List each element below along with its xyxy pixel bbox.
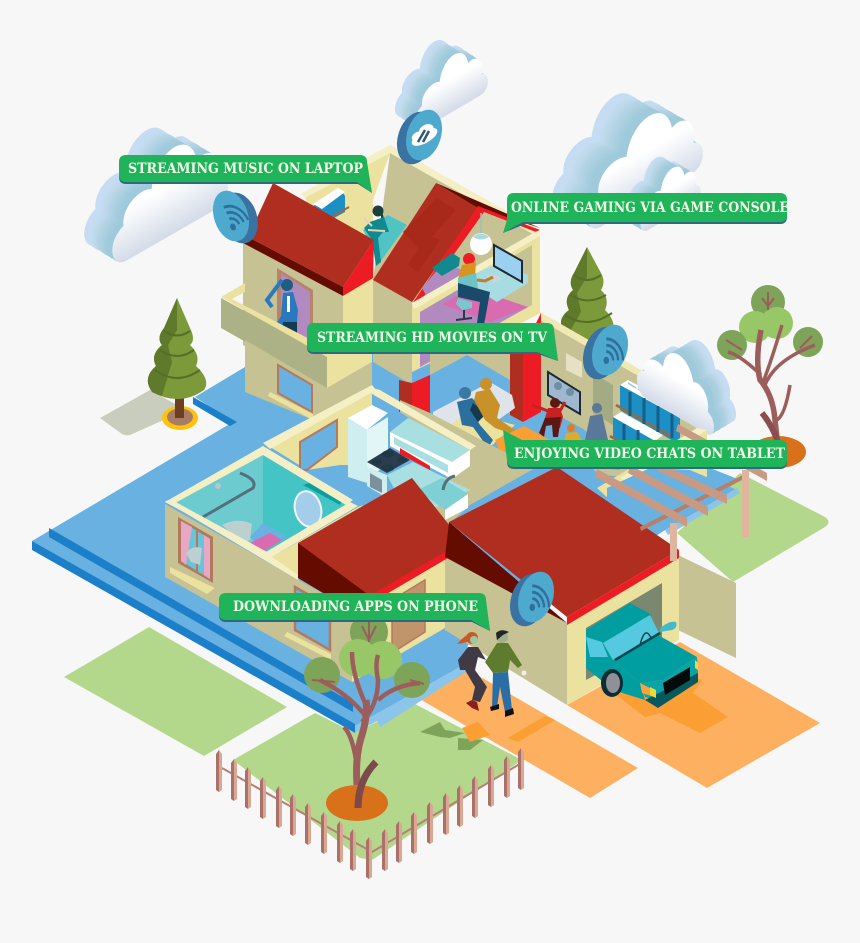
round tree: right (717, 285, 823, 468)
wifi disc: left (207, 186, 264, 248)
upper room interior (420, 245, 532, 367)
bath tub (222, 521, 252, 543)
bath right wall (263, 452, 350, 552)
sofa (433, 382, 515, 447)
red column left (399, 375, 430, 425)
rear yellow wall at pergola (597, 428, 707, 500)
label: streaming HD: STREAMING HD MOVIES ON TV (317, 330, 548, 346)
rear wall (540, 315, 707, 482)
balcony (221, 283, 372, 388)
platform front face (355, 667, 462, 733)
hanging lamp (470, 213, 492, 255)
shower rail (203, 473, 254, 517)
purple room through door (281, 273, 310, 343)
living room back wall (412, 345, 523, 425)
lower window (278, 365, 312, 412)
lawn: right (677, 473, 828, 582)
fridge (348, 405, 388, 483)
person: gray standing (585, 403, 608, 440)
wall panel (566, 353, 582, 378)
label: downloading apps: DOWNLOADING APPS ON PHONE (233, 599, 478, 615)
living room frame (430, 352, 510, 380)
half wall (400, 400, 535, 528)
lawn: left (64, 627, 287, 756)
fence (216, 748, 524, 879)
main left wall (243, 243, 343, 405)
person: man on balcony (267, 279, 298, 340)
wifi disc: garage (504, 567, 560, 631)
pine tree: right (561, 247, 614, 345)
right roof (373, 183, 540, 304)
floor (460, 400, 620, 470)
upper room front frame (412, 230, 540, 383)
oven and cooktop (367, 448, 410, 498)
label: video chats: ENJOYING VIDEO CHATS ON TABLET (514, 446, 786, 462)
label: downloading apps (219, 593, 490, 631)
orange walkway (418, 668, 638, 798)
bath window (178, 517, 213, 583)
rod (303, 483, 342, 505)
front wing roof (298, 478, 465, 606)
shower head (215, 483, 221, 489)
wing front wall (352, 555, 445, 682)
counter (387, 462, 470, 510)
person: woman on laptop (364, 206, 389, 266)
rear wall rim (540, 312, 707, 415)
wing sill (284, 632, 331, 660)
bookshelf (610, 380, 690, 458)
car (586, 603, 698, 708)
cloud upload disc: top (391, 105, 448, 169)
person at desk (456, 253, 493, 325)
kitchen back wall (267, 392, 372, 470)
deck (607, 468, 737, 530)
balcony door (277, 268, 313, 345)
bath left wall (175, 452, 263, 552)
label: video chats (503, 430, 787, 469)
cloud icon (407, 121, 440, 149)
apex rims (300, 145, 540, 238)
wall rim by pergola (620, 428, 707, 483)
person: red dancing (532, 398, 565, 437)
pergola (595, 424, 767, 561)
wing lower window (295, 587, 330, 650)
garage right wall (678, 555, 736, 658)
walkway shadow (462, 716, 555, 742)
person: man walking (485, 630, 526, 717)
toilet lid (291, 488, 325, 530)
person: blue seated (457, 387, 493, 448)
rear door (593, 373, 613, 425)
bath floor (250, 523, 287, 551)
person shadows on lawn (420, 722, 483, 750)
bath mat (250, 533, 282, 552)
label: streaming music: STREAMING MUSIC ON LAPTOP (128, 161, 363, 177)
upper cabinet (390, 418, 470, 479)
person: gold seated (474, 378, 518, 436)
wing door (392, 580, 425, 653)
cloud: left (84, 99, 228, 269)
bath sill (170, 567, 215, 594)
deck light strip (665, 488, 740, 535)
kitchen rim (263, 385, 376, 449)
bath rim (165, 446, 353, 555)
left wing side wall (165, 504, 352, 682)
half wall rim (372, 388, 476, 450)
red column right (510, 313, 541, 422)
orange driveway (567, 642, 820, 788)
transfer arrows (418, 130, 429, 142)
platform edge strip, outer (32, 541, 355, 733)
person: woman walking (457, 632, 487, 711)
house (165, 105, 767, 879)
garage side wall (445, 555, 567, 705)
bathroom (165, 446, 358, 557)
pine tree: left (148, 298, 206, 430)
platform back strip (193, 397, 237, 426)
bed (363, 215, 407, 262)
cloud: large right (552, 65, 703, 235)
left roof (243, 183, 374, 296)
kitchen window (300, 420, 337, 470)
wifi disc: right (577, 320, 634, 384)
cloud: right side (637, 317, 736, 438)
central yellow column (343, 278, 373, 345)
bath front rim (266, 502, 358, 557)
inner light strip (377, 665, 466, 727)
apex right wall (373, 153, 540, 303)
label: online gaming (503, 193, 789, 233)
kitchen floor (338, 394, 450, 510)
wall TV (548, 372, 580, 414)
lawn: front (233, 703, 522, 860)
upper frame highlight (412, 230, 540, 309)
shelf: top books (313, 188, 349, 218)
bed seen above rim (432, 253, 460, 276)
garage roof (445, 467, 679, 625)
wall above roof (272, 505, 363, 575)
sink (418, 476, 468, 520)
concrete slab (100, 390, 186, 435)
driveway oil shadow (586, 660, 728, 733)
blue platform (32, 330, 740, 733)
person: child (564, 424, 582, 442)
left wing rim (165, 500, 300, 580)
label: streaming music (119, 155, 372, 193)
round tree: front (304, 613, 430, 821)
label: online gaming: ONLINE GAMING VIA GAME CONSOLE (511, 200, 789, 216)
cloud: small front (624, 142, 701, 234)
cloud: top (395, 22, 488, 134)
lower sill (268, 392, 313, 420)
apex left wall (305, 153, 390, 295)
lower left wall (245, 340, 372, 420)
central beige column (373, 278, 412, 385)
label: streaming HD (307, 323, 558, 361)
garage opening (586, 583, 662, 680)
garage front (567, 555, 679, 705)
orange coffee table (495, 426, 550, 455)
platform edge strip, inner (49, 528, 353, 712)
room seen above rim (422, 263, 467, 297)
